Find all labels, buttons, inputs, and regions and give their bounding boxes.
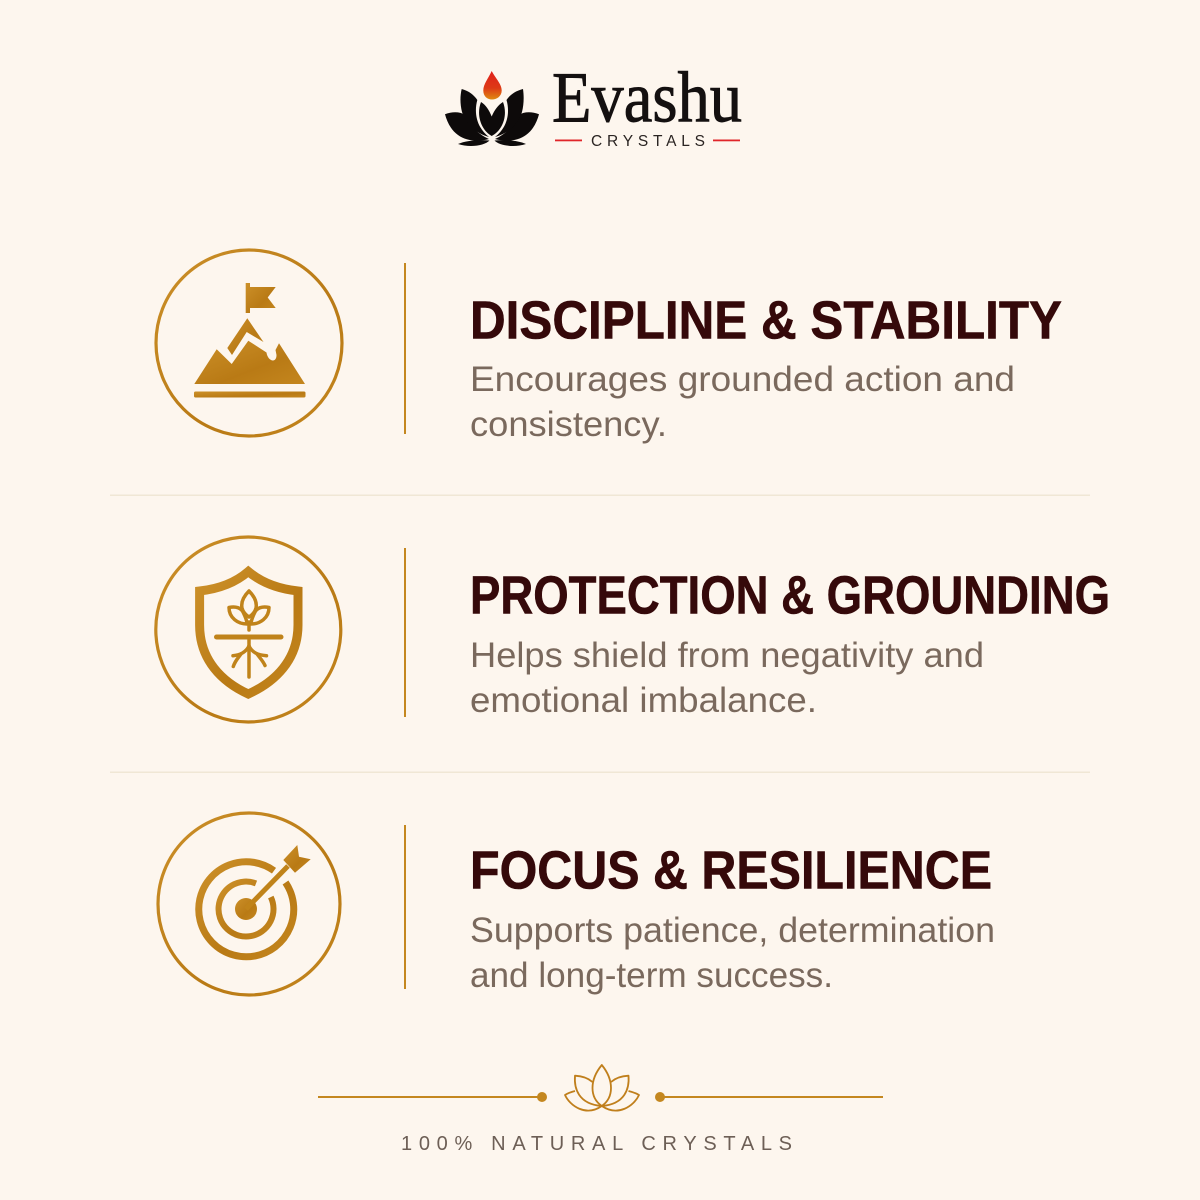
icon: mountain with flag <box>156 250 342 436</box>
description: Encourages grounded action and <box>470 360 1015 399</box>
icon: lotus with red drop <box>445 71 539 146</box>
divider <box>404 548 406 717</box>
divider <box>404 825 406 989</box>
description: consistency. <box>470 405 667 444</box>
heading: DISCIPLINE & STABILITY <box>470 290 1062 350</box>
ornament: left line and dot <box>318 1092 547 1102</box>
icon: target with arrow <box>158 813 340 995</box>
panel: focus and resilience <box>158 813 995 995</box>
divider <box>404 263 406 434</box>
panel: discipline and stability <box>156 250 1062 444</box>
heading: FOCUS & RESILIENCE <box>470 840 992 900</box>
ornament: right line and dot <box>655 1092 883 1102</box>
footer tagline: 100% NATURAL CRYSTALS <box>401 1133 792 1155</box>
description: Supports patience, determination <box>470 911 995 950</box>
description: Helps shield from negativity and <box>470 636 984 675</box>
red rule right <box>713 140 740 141</box>
footer <box>318 1065 883 1155</box>
description: emotional imbalance. <box>470 681 817 720</box>
red rule left <box>555 140 582 141</box>
panel: protection and grounding <box>156 537 1110 722</box>
description: and long-term success. <box>470 956 833 995</box>
brand subtitle: CRYSTALS <box>591 133 705 150</box>
logo <box>445 58 742 150</box>
icon: outline lotus <box>565 1065 639 1111</box>
icon: shield with plant and roots <box>156 537 341 722</box>
brand name: Evashu <box>552 58 742 138</box>
